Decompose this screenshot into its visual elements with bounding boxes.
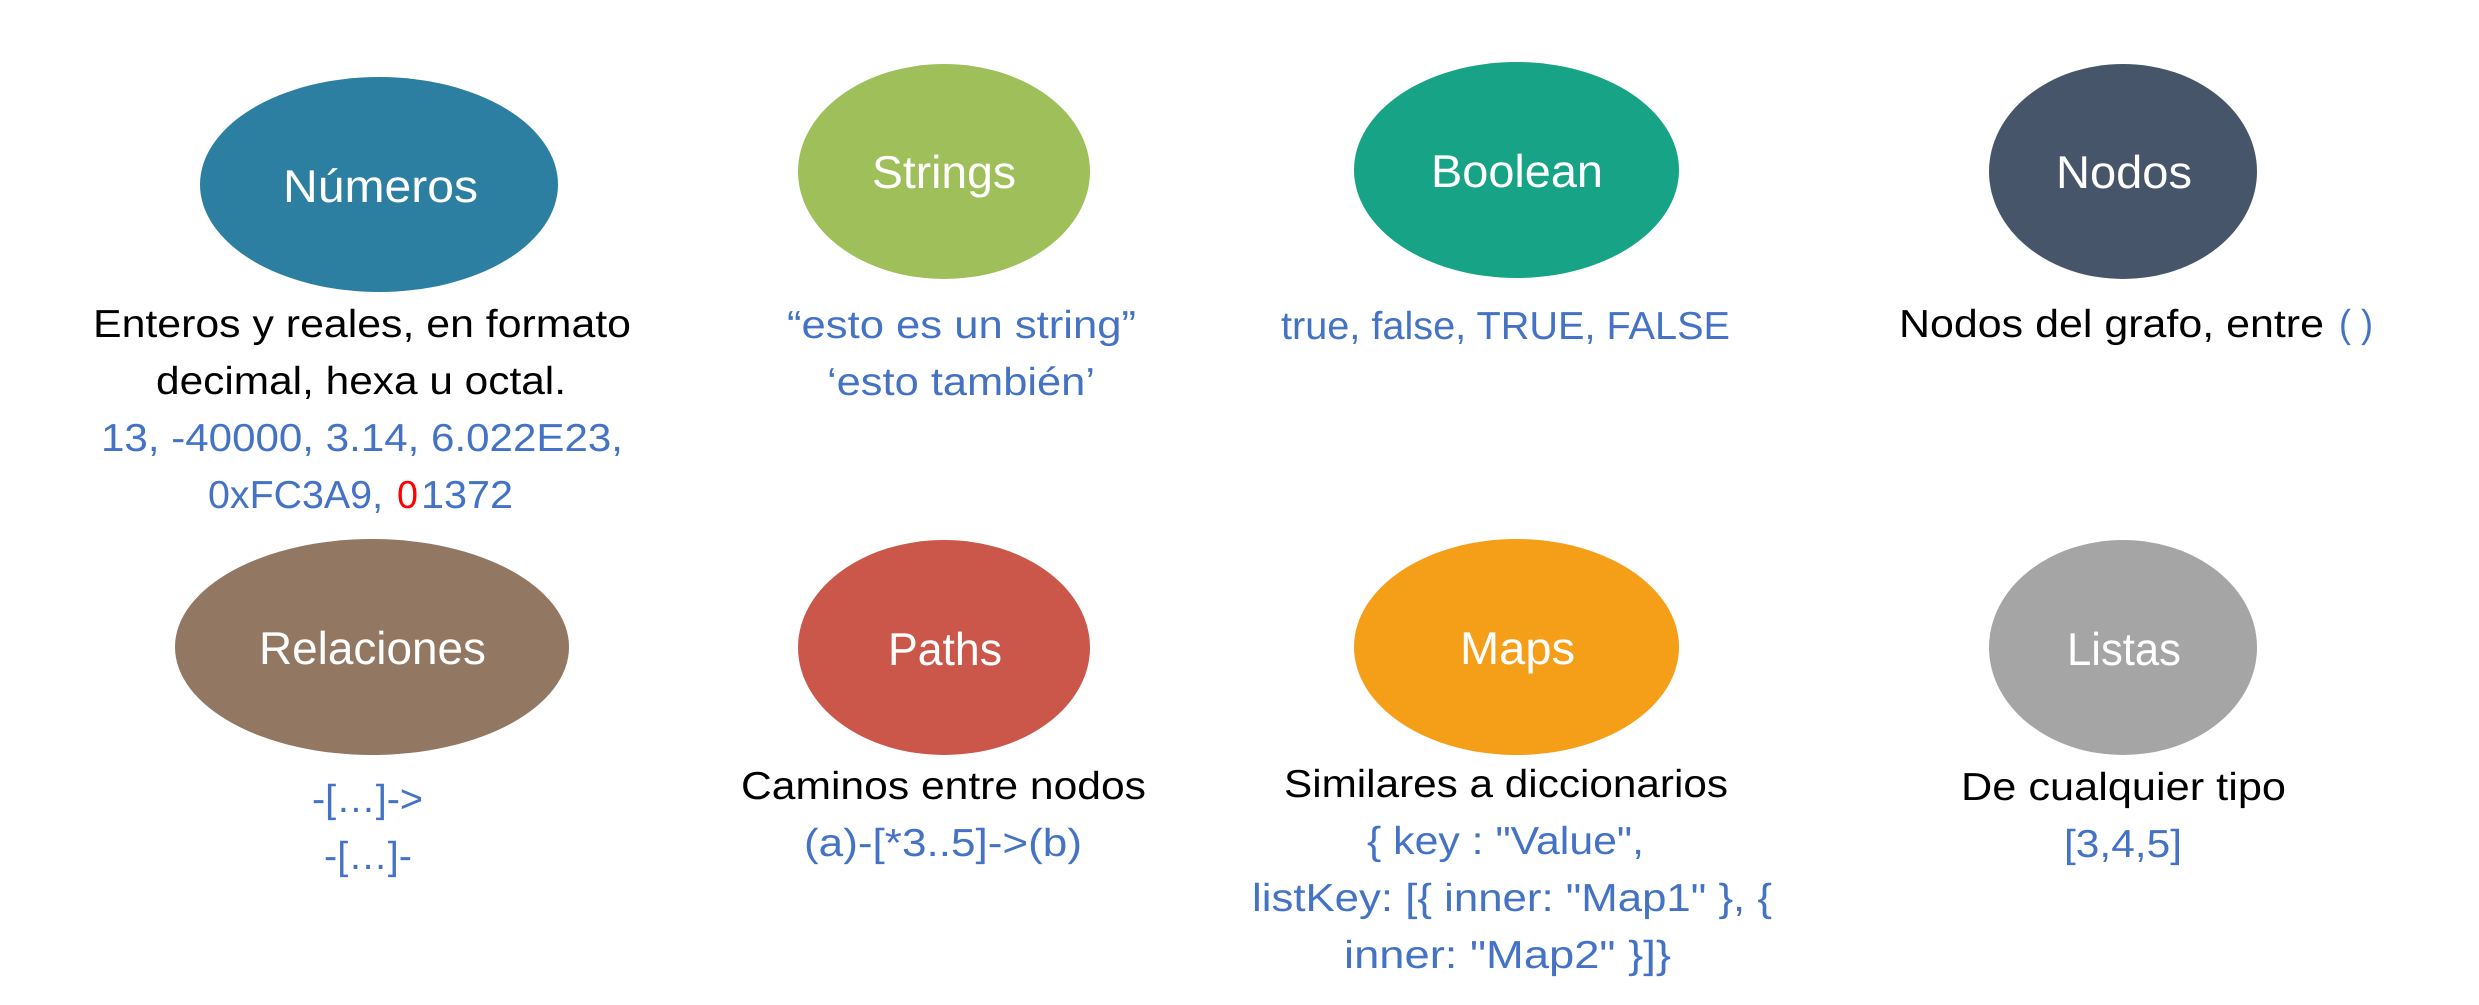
heading: Números: Números — [283, 160, 478, 212]
description: Paths: Caminos entre nodos — [741, 765, 1146, 808]
examples: Strings: “esto es un string” — [787, 304, 1136, 347]
description: Maps: Similares a diccionarios — [1284, 763, 1728, 806]
examples: Boolean: true, false, TRUE, FALSE — [1281, 305, 1730, 348]
heading: Strings: Strings — [872, 146, 1016, 198]
panel: Listas — [1961, 540, 2286, 866]
heading: Boolean: Boolean — [1431, 145, 1603, 197]
examples: Strings: ‘esto también’ — [827, 361, 1095, 404]
panel: Boolean — [1281, 62, 1730, 348]
examples: Paths: (a)-[*3..5]->(b) — [804, 822, 1082, 865]
examples: Números: 13, -40000, 3.14, 6.022E23, — [101, 417, 623, 460]
panel: Strings — [787, 64, 1136, 404]
description: Listas: De cualquier tipo — [1961, 766, 2286, 809]
examples: Maps — [1252, 820, 1772, 977]
description: Números — [93, 303, 631, 403]
description: Números: Enteros y reales, en formato — [93, 303, 631, 346]
ellipse: Strings — [798, 64, 1090, 279]
heading: Listas: Listas — [2067, 623, 2181, 675]
ellipse: Relaciones — [175, 539, 569, 755]
examples: Relaciones: -[…]- — [324, 835, 412, 878]
examples: Maps: { key : "Value", — [1367, 820, 1644, 863]
examples: Relaciones — [312, 778, 423, 878]
examples: Números: 0xFC3A9, — [208, 474, 383, 517]
ellipse: Boolean — [1354, 62, 1679, 278]
panel: Paths — [741, 540, 1146, 865]
panel: Maps — [1252, 539, 1772, 977]
heading: Paths: Paths — [888, 623, 1002, 675]
examples: Números — [101, 417, 623, 517]
panel: Números — [93, 77, 631, 517]
panel: Relaciones — [175, 539, 569, 878]
ellipse: Paths — [798, 540, 1090, 755]
ellipse: Nodos — [1989, 64, 2257, 279]
examples: Maps: listKey: [{ inner: "Map1" }, { — [1252, 877, 1772, 920]
heading: Maps: Maps — [1460, 622, 1575, 674]
ellipse: Maps — [1354, 539, 1679, 755]
description: Números: decimal, hexa u octal. — [156, 360, 566, 403]
ellipse: Números — [200, 77, 558, 292]
examples: Maps: inner: "Map2" }]} — [1344, 934, 1671, 977]
examples: Listas: [3,4,5] — [2064, 823, 2182, 866]
description: Nodos: Nodos del grafo, entre — [1899, 303, 2324, 346]
description: Nodos: ( ) — [2339, 303, 2373, 346]
ellipse: Listas — [1989, 540, 2257, 755]
heading: Relaciones: Relaciones — [259, 622, 486, 674]
examples: Strings — [787, 304, 1136, 404]
examples: Relaciones: -[…]-> — [312, 778, 423, 821]
examples: Números: 0 — [397, 474, 418, 517]
examples: Números: 1372 — [421, 474, 513, 517]
heading: Nodos: Nodos — [2056, 146, 2192, 198]
panel: Nodos — [1899, 64, 2373, 346]
